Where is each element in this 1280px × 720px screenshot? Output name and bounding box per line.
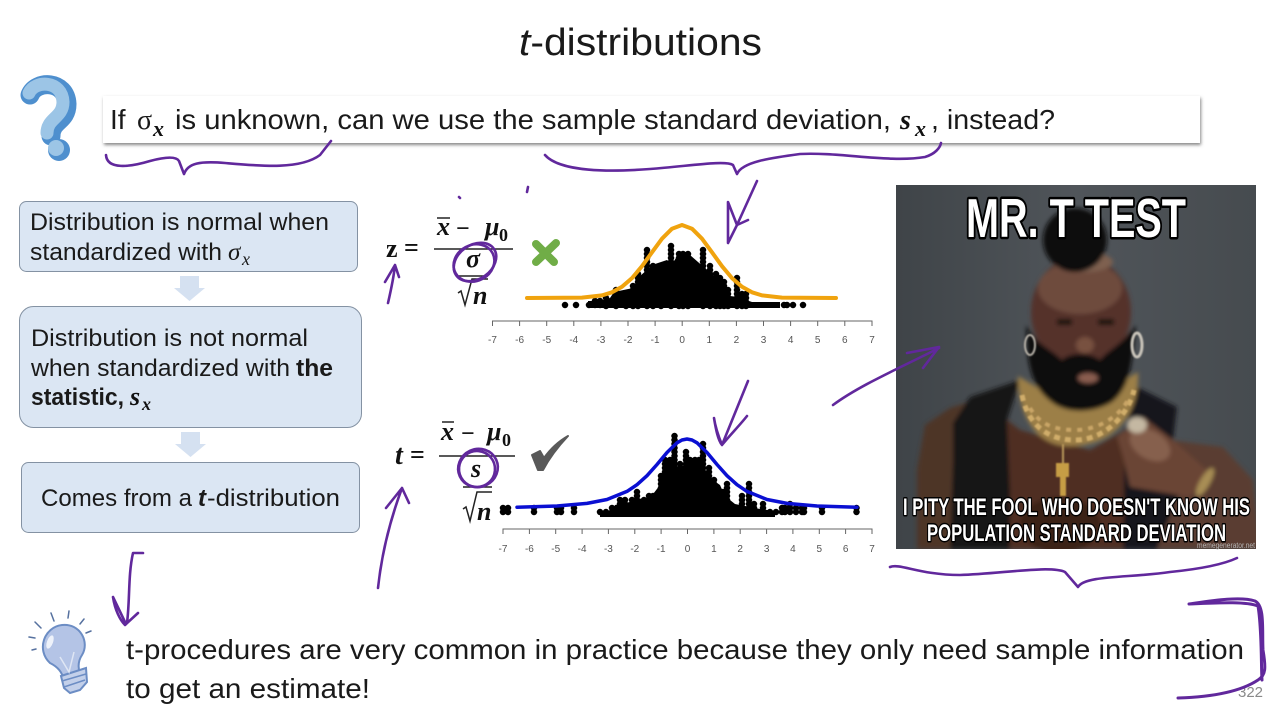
flow box: normal with sigma: σ: [228, 239, 242, 266]
chart: t dot plot with blue curve: -1: [657, 544, 666, 555]
arrow: flow down 2: [175, 432, 206, 457]
arrow to z: [385, 265, 399, 303]
formula: z statistic: 0: [499, 225, 508, 245]
arrow to t plot: [714, 381, 748, 445]
meme watermark: memegenerator.net: [1197, 541, 1256, 550]
panel: question banner: If: [110, 104, 126, 135]
panel: question banner: is unknown, can we use the sample standard deviation,: [175, 104, 891, 135]
panel: question banner: x: [914, 116, 926, 141]
flow box: not normal with s: Distribution is not normal: [31, 325, 308, 352]
takeaway text: t-procedures are very common in practice because they only need sample information: [126, 634, 1244, 665]
flow box: not normal with s: s: [129, 382, 140, 411]
arrow to takeaway: [113, 553, 143, 625]
circle around s: [452, 442, 504, 494]
formula: z statistic: σ: [466, 244, 481, 273]
panel: question banner: x: [152, 116, 164, 141]
arrow to t: [378, 488, 409, 588]
brace under second clause: [545, 143, 941, 174]
chart: t dot plot with blue curve: -3: [604, 544, 613, 555]
chart: normal dot plot with orange curve: 4: [788, 335, 794, 346]
icon: grey check mark: [532, 436, 568, 470]
panel: question banner: s: [899, 105, 911, 136]
formula: t statistic: n: [477, 497, 491, 526]
flow box: not normal with s: statistic,: [31, 384, 124, 411]
formula: z statistic: =: [404, 233, 419, 262]
formula: z statistic: z: [386, 234, 398, 263]
icon: green cross: [536, 243, 556, 262]
flow box: not normal with s: [20, 306, 362, 428]
formula: t statistic: −: [461, 421, 475, 447]
formula: z statistic: [386, 212, 513, 310]
brace under meme: [890, 558, 1237, 587]
arrow to meme: [833, 347, 939, 405]
takeaway text: to get an estimate!: [126, 673, 370, 704]
flow box: normal with sigma: [20, 202, 358, 272]
chart: normal dot plot with orange curve: -4: [569, 335, 579, 346]
flow box: t-distribution: -distribution: [207, 485, 340, 512]
panel: question banner: σ: [137, 105, 152, 136]
formula: z statistic: −: [456, 216, 470, 242]
chart: t dot plot with blue curve: 1: [711, 544, 717, 555]
brace under first clause: [106, 141, 331, 174]
chart: t dot plot with blue curve: [499, 432, 875, 555]
formula: t statistic: s: [470, 454, 481, 483]
chart: normal dot plot with orange curve: 7: [869, 335, 875, 346]
panel: question banner: [103, 96, 1200, 143]
flow box: normal with sigma: x: [241, 249, 250, 269]
formula: t statistic: 0: [502, 430, 511, 450]
chart: normal dot plot with orange curve: -3: [596, 335, 606, 346]
handwritten purple annotations: [106, 141, 1265, 698]
chart: normal dot plot with orange curve: -7: [488, 335, 497, 346]
meme image: Mr. T test: [896, 185, 1260, 553]
arrow: flow down 1: [174, 276, 205, 301]
title: t-distributions: [519, 22, 762, 64]
flow box: normal with sigma: standardized with: [30, 239, 222, 266]
flow box: t-distribution: [22, 462, 360, 532]
flow box: t-distribution: t: [198, 485, 207, 512]
chart: normal dot plot with orange curve: 2: [734, 335, 740, 346]
chart: t dot plot with blue curve: 7: [869, 544, 875, 555]
flow box: not normal with s: x: [141, 394, 151, 414]
formula: t statistic: x: [440, 417, 454, 446]
flow box: not normal with s: the: [296, 355, 333, 382]
flow box: normal with sigma: Distribution is normal when: [30, 209, 329, 236]
chart: normal dot plot with orange curve: [488, 225, 875, 346]
formula: t statistic: μ: [485, 417, 501, 446]
flow box: not normal with s: when standardized with: [30, 355, 290, 382]
chart: normal dot plot with orange curve: 0: [679, 335, 685, 346]
chart: normal dot plot with orange curve: 6: [842, 335, 848, 346]
chart: normal dot plot with orange curve: -1: [651, 335, 660, 346]
chart: t dot plot with blue curve: 6: [843, 544, 849, 555]
chart: normal dot plot with orange curve: -6: [515, 335, 524, 346]
chart: t dot plot with blue curve: 3: [764, 544, 770, 555]
chart: t dot plot with blue curve: 5: [817, 544, 823, 555]
icon: light bulb: [29, 611, 91, 693]
formula: z statistic: μ: [483, 212, 499, 241]
meme bottom caption: [903, 494, 1250, 547]
slide number: 322: [1238, 684, 1263, 701]
formula: z statistic: x: [436, 212, 450, 241]
bracket around end of takeaway: [1178, 599, 1265, 698]
formula: z statistic: n: [473, 281, 487, 310]
icon: question mark: [29, 84, 70, 161]
chart: t dot plot with blue curve: -6: [525, 544, 534, 555]
chart: t dot plot with blue curve: -4: [578, 544, 587, 555]
chart: normal dot plot with orange curve: 5: [815, 335, 821, 346]
meme top caption: MR. T TEST: [966, 187, 1186, 249]
chart: t dot plot with blue curve: -7: [499, 544, 508, 555]
formula: t statistic: t: [395, 440, 404, 471]
chart: normal dot plot with orange curve: 3: [761, 335, 767, 346]
formula: t statistic: =: [410, 440, 425, 469]
chart: t dot plot with blue curve: -2: [630, 544, 640, 555]
panel: question banner: , instead?: [931, 104, 1055, 135]
chart: t dot plot with blue curve: -5: [551, 544, 561, 555]
stray ink marks: [459, 187, 528, 198]
arrow to normal plot: [728, 181, 757, 243]
flow box: t-distribution: Comes from a: [41, 485, 193, 512]
chart: normal dot plot with orange curve: 1: [707, 335, 713, 346]
chart: t dot plot with blue curve: 4: [790, 544, 796, 555]
chart: t dot plot with blue curve: 2: [737, 544, 743, 555]
formula: t statistic: [395, 417, 515, 526]
chart: normal dot plot with orange curve: -5: [542, 335, 552, 346]
circle around sigma: [446, 235, 504, 289]
takeaway text: [126, 634, 1244, 704]
chart: t dot plot with blue curve: 0: [685, 544, 691, 555]
chart: normal dot plot with orange curve: -2: [624, 335, 633, 346]
